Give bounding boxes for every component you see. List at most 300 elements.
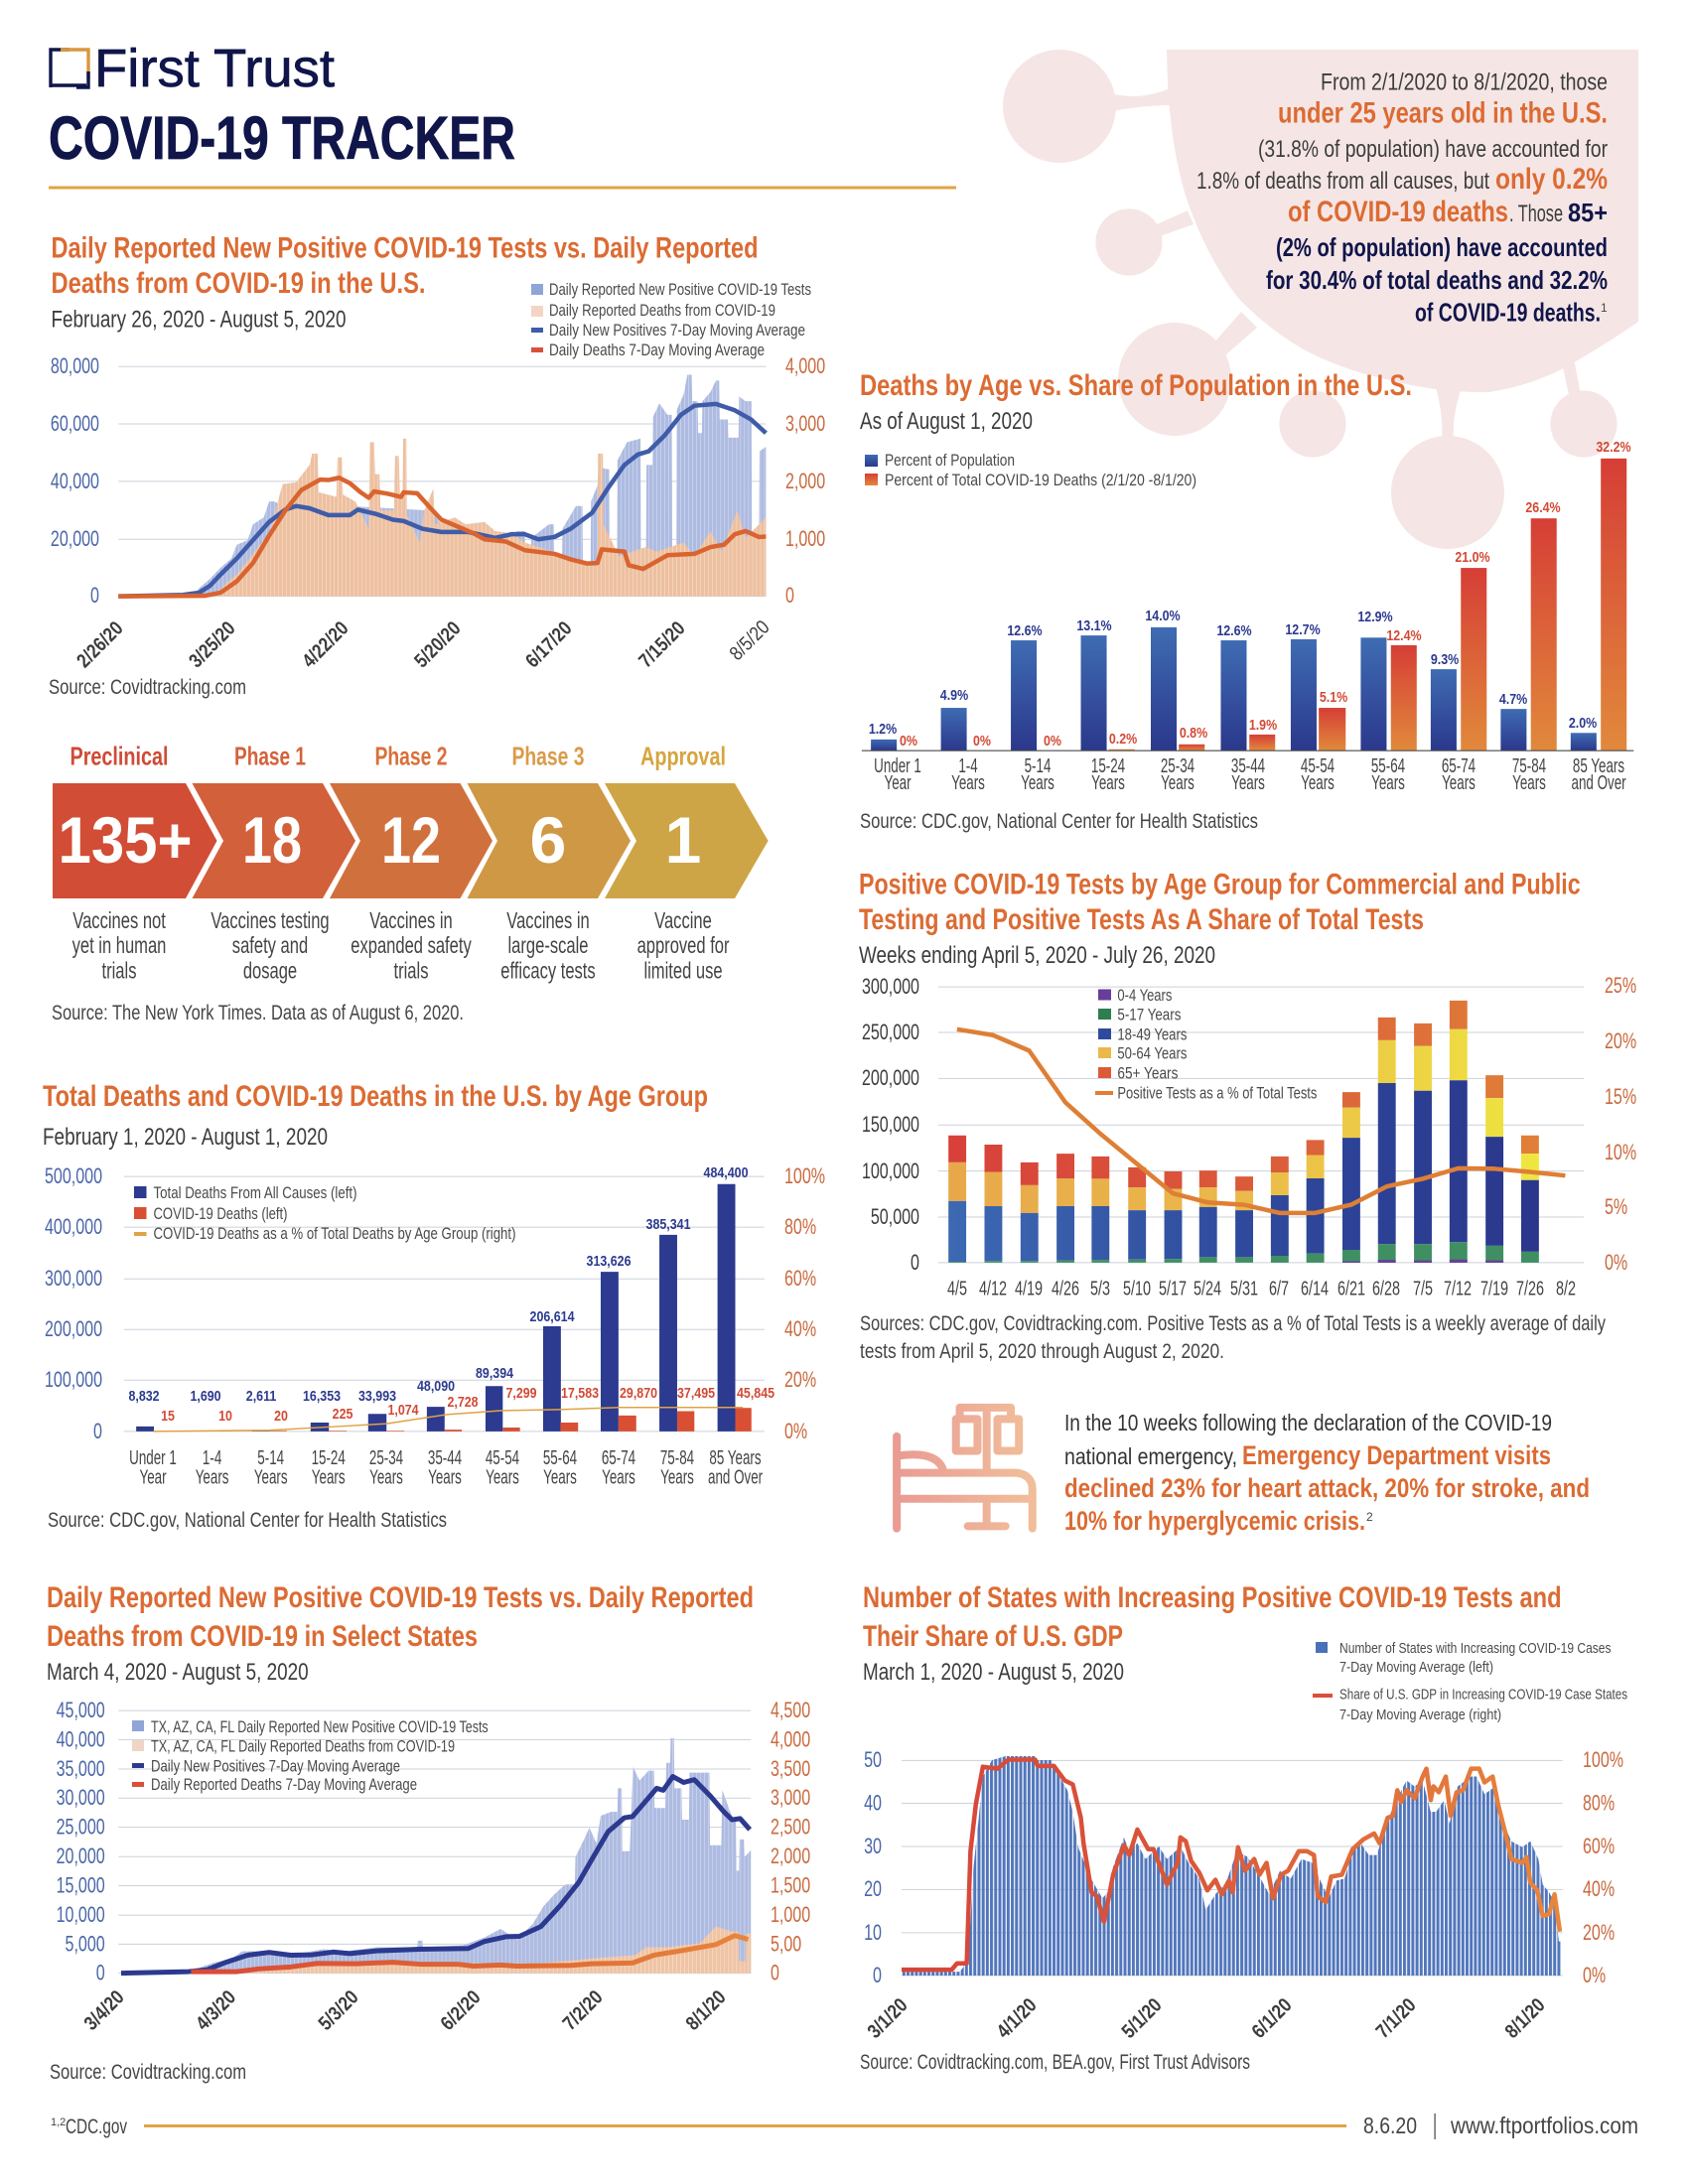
chart: select states: 3,500 — [771, 1758, 810, 1782]
bar chart: deaths by age group: 35-44 — [428, 1446, 462, 1469]
chart: daily tests and deaths: 2,000 — [785, 471, 825, 494]
legend: chart 4: 50-64 Years — [1117, 1044, 1187, 1063]
chevrons with counts: 1 — [665, 803, 701, 877]
heading: chart 1: Daily Reported New Positive COVID-19 Tests vs. Daily Reported — [52, 232, 759, 264]
bar chart: population and deaths by age: 35-44 — [1231, 754, 1265, 777]
bar chart: population and deaths by age: and Over — [1572, 771, 1626, 794]
chevrons with counts: 6 — [530, 803, 566, 877]
chart: daily tests and deaths: 3/25/20 — [185, 617, 240, 672]
bar chart: deaths by age group: 500,000 — [45, 1165, 102, 1189]
stacked bar chart: tests by age: 4/19 — [1015, 1277, 1043, 1299]
stage descriptions: Vaccines in — [506, 908, 590, 934]
stacked bar chart: tests by age: 150,000 — [862, 1114, 919, 1138]
stacked bar chart: tests by age: 6/28 — [1372, 1277, 1400, 1299]
legend: chart 5 — [132, 1717, 489, 1794]
chart: states count and GDP share: 40% — [1583, 1878, 1615, 1902]
stage labels: Phase 1 — [234, 741, 306, 770]
bar chart: population and deaths by age: 21.0% — [1455, 549, 1490, 565]
heading: chart 1 — [52, 232, 759, 334]
chart: select states: 5/3/20 — [315, 1986, 363, 2035]
bar chart: deaths by age group: 15-24 — [312, 1446, 346, 1469]
bar chart: population and deaths by age: 12.6% — [1007, 622, 1043, 638]
stage descriptions: expanded safety — [351, 933, 472, 959]
chart: daily tests and deaths: 3,000 — [785, 413, 825, 437]
source: chart 4: tests from April 5, 2020 through August 2, 2020. — [860, 1340, 1224, 1363]
panel: total deaths and COVID-19 deaths by age — [43, 1080, 825, 1532]
bar chart: deaths by age group: Years — [602, 1466, 635, 1488]
stage descriptions: Vaccines testing — [211, 908, 330, 934]
chart: states count and GDP share: 0% — [1583, 1965, 1606, 1988]
legend: chart 4: 18-49 Years — [1117, 1024, 1187, 1043]
text: emergency visits: Emergency Department visits — [1242, 1440, 1551, 1470]
bar chart: population and deaths by age: 26.4% — [1525, 499, 1561, 515]
title: COVID-19 TRACKER — [49, 104, 515, 172]
chart: states count and GDP share: 80% — [1583, 1792, 1615, 1816]
chart: daily tests and deaths: 1,000 — [785, 528, 825, 552]
legend: chart 3 — [134, 1183, 516, 1243]
bar chart: population and deaths by age: Years — [1371, 771, 1405, 794]
bar chart: population and deaths by age: Under 1 — [874, 754, 921, 777]
text: emergency visits: declined 23% for heart attack, 20% for stroke, and — [1064, 1473, 1590, 1503]
panel: emergency department callout — [897, 1408, 1590, 1536]
chevrons with counts — [53, 783, 769, 898]
stacked bar chart: tests by age: 50,000 — [871, 1206, 919, 1230]
chart: select states: 4,000 — [771, 1728, 810, 1752]
bar chart: population and deaths by age: Years — [1091, 771, 1125, 794]
stacked bar chart: tests by age: 7/12 — [1444, 1277, 1472, 1299]
bar chart: population and deaths by age: Years — [1021, 771, 1055, 794]
callout: age share of deaths: 85+ — [1568, 198, 1608, 227]
source: chart 3: Source: CDC.gov, National Center for Health Statistics — [48, 1509, 447, 1532]
legend: chart 4: 65+ Years — [1117, 1063, 1178, 1082]
chart: states count and GDP share: 20 — [864, 1878, 882, 1902]
bar chart: deaths by age group: 65-74 — [602, 1446, 635, 1469]
chart: states count and GDP share: 100% — [1583, 1749, 1623, 1773]
callout: age share of deaths: From 2/1/2020 to 8/1/2020, those — [1321, 69, 1608, 95]
panel: vaccine pipeline — [52, 741, 769, 1024]
bar chart: deaths by age group: 80% — [784, 1216, 816, 1240]
legend: chart 3: COVID-19 Deaths (left) — [153, 1204, 288, 1223]
stacked bar chart: tests by age: 4/12 — [979, 1277, 1007, 1299]
heading: chart 3 — [43, 1080, 708, 1151]
bar chart: deaths by age group: 200,000 — [45, 1318, 102, 1342]
bar chart: population and deaths by age: 12.4% — [1386, 627, 1422, 643]
stage descriptions: Vaccines in — [369, 908, 453, 934]
panel: positive tests by age group — [859, 868, 1636, 1363]
legend: chart 6: Number of States with Increasing COVID-19 Cases — [1339, 1640, 1611, 1657]
chart: states count and GDP share: 0 — [873, 1965, 882, 1988]
chart: select states — [57, 1700, 810, 2035]
legend: chart 5: TX, AZ, CA, FL Daily Reported New Positive COVID-19 Tests — [151, 1717, 489, 1736]
bar chart: population and deaths by age: 14.0% — [1145, 608, 1181, 623]
stacked bar chart: tests by age: 6/21 — [1337, 1277, 1365, 1299]
bar chart: population and deaths by age: 5-14 — [1025, 754, 1051, 777]
bar chart: deaths by age group: 45,845 — [737, 1385, 774, 1401]
chart: daily tests and deaths: 4,000 — [785, 355, 825, 379]
chart: select states: 45,000 — [57, 1700, 105, 1723]
chart: daily tests and deaths — [51, 355, 825, 672]
bar chart: deaths by age group: 100% — [784, 1165, 825, 1189]
bar chart: deaths by age group: Years — [369, 1466, 403, 1488]
bar chart: deaths by age group: 1,074 — [387, 1402, 419, 1418]
chart: select states: 2,500 — [771, 1816, 810, 1840]
chart: daily tests and deaths: 6/17/20 — [521, 617, 577, 672]
callout: age share of deaths: for 30.4% of total deaths and 32.2% — [1266, 265, 1608, 295]
panel: deaths by age vs population — [860, 369, 1633, 833]
bar chart: deaths by age group: 20 — [274, 1408, 288, 1424]
bar chart: deaths by age group: Years — [428, 1466, 462, 1488]
bar chart: population and deaths by age: 0% — [1044, 733, 1061, 749]
footnote: 1,2 — [51, 2116, 66, 2128]
bar chart: population and deaths by age: 4.7% — [1499, 691, 1527, 707]
bar chart: deaths by age group: 7,299 — [505, 1385, 537, 1401]
chart: daily tests and deaths: 0 — [90, 585, 99, 609]
bar chart: population and deaths by age: 1.9% — [1249, 717, 1277, 733]
bar chart: population and deaths by age: 4.9% — [940, 687, 968, 703]
legend: chart 1: Daily Reported New Positive COVID-19 Tests — [549, 280, 811, 299]
chart: daily tests and deaths: 2/26/20 — [72, 617, 128, 672]
footnote — [51, 2116, 127, 2138]
stacked bar chart: tests by age: 8/2 — [1556, 1277, 1576, 1299]
stacked bar chart: tests by age: 5/31 — [1230, 1277, 1258, 1299]
legend: chart 5: Daily Reported Deaths 7-Day Moving Average — [151, 1775, 417, 1794]
heading: chart 4: Testing and Positive Tests As A Share of Total Tests — [859, 903, 1424, 936]
bar chart: deaths by age group: 8,832 — [128, 1388, 160, 1404]
stage descriptions: trials — [394, 959, 428, 984]
chart: select states: 4/3/20 — [192, 1986, 240, 2035]
stage descriptions: dosage — [243, 959, 297, 984]
bar chart: deaths by age group — [45, 1164, 825, 1488]
stage descriptions — [72, 908, 730, 984]
callout: age share of deaths: 1.8% of deaths from all causes, but — [1196, 168, 1489, 195]
chart: daily tests and deaths: 20,000 — [51, 528, 99, 552]
legend: chart 5: Daily New Positives 7-Day Moving Average — [151, 1757, 400, 1775]
chart: select states: 3,000 — [771, 1787, 810, 1811]
bar chart: population and deaths by age: 75-84 — [1512, 754, 1546, 777]
stacked bar chart: tests by age: 5/3 — [1090, 1277, 1110, 1299]
bar chart: deaths by age group: 206,614 — [530, 1308, 575, 1324]
stacked bar chart: tests by age: 15% — [1605, 1086, 1636, 1110]
bar chart: deaths by age group: and Over — [708, 1466, 763, 1488]
bar chart: deaths by age group: 25-34 — [369, 1446, 403, 1469]
legend: chart 1: Daily New Positives 7-Day Moving Average — [549, 321, 805, 340]
bar chart: population and deaths by age: 12.6% — [1216, 622, 1252, 638]
bar chart: deaths by age group: 10 — [218, 1408, 232, 1424]
bar chart: deaths by age group: 40% — [784, 1318, 816, 1342]
stage descriptions: Vaccine — [654, 908, 712, 934]
bar chart: deaths by age group: Years — [254, 1466, 288, 1488]
footnote: CDC.gov — [66, 2116, 127, 2138]
chart: states count and GDP share: 40 — [864, 1792, 882, 1816]
chart: select states: 35,000 — [57, 1758, 105, 1782]
legend: chart 6: 7-Day Moving Average (right) — [1339, 1706, 1501, 1723]
bar chart: population and deaths by age: 55-64 — [1371, 754, 1405, 777]
chart: daily tests and deaths: 0 — [785, 585, 794, 609]
source: chart 6: Source: Covidtracking.com, BEA.gov, First Trust Advisors — [860, 2051, 1250, 2074]
heading: chart 6 — [863, 1581, 1562, 1686]
heading: chart 6: Their Share of U.S. GDP — [863, 1620, 1123, 1653]
stacked bar chart: tests by age — [862, 975, 1636, 1299]
legend: chart 1 — [531, 280, 811, 359]
bar chart: deaths by age group: 55-64 — [543, 1446, 577, 1469]
text: emergency visits — [1064, 1410, 1590, 1536]
chart: select states: 15,000 — [57, 1874, 105, 1898]
heading: chart 4 — [859, 868, 1581, 969]
chart: select states: 5,00 — [771, 1933, 801, 1957]
bar chart: deaths by age group: Years — [486, 1466, 519, 1488]
chart: states count and GDP share: 8/1/20 — [1501, 1994, 1550, 2043]
bar chart: deaths by age group: Years — [312, 1466, 346, 1488]
heading: chart 1: Deaths from COVID-19 in the U.S. — [52, 267, 425, 300]
bar chart: population and deaths by age: Year — [885, 771, 912, 794]
bar chart: population and deaths by age: 1-4 — [958, 754, 978, 777]
heading: chart 2: As of August 1, 2020 — [860, 408, 1033, 435]
stacked bar chart: tests by age: 5/10 — [1123, 1277, 1151, 1299]
chart: states count and GDP share: 7/1/20 — [1372, 1994, 1421, 2043]
chevrons with counts: 135+ — [58, 803, 193, 877]
bar chart: deaths by age group: 2,728 — [447, 1394, 479, 1410]
callout: age share of deaths: (31.8% of population) have accounted for — [1258, 136, 1608, 163]
bar chart: deaths by age group: 1,690 — [190, 1388, 221, 1404]
stacked bar chart: tests by age: 200,000 — [862, 1067, 919, 1091]
chart: select states: 4,500 — [771, 1700, 810, 1723]
text: emergency visits: In the 10 weeks following the declaration of the COVID-19 — [1064, 1410, 1552, 1435]
chart: select states: 8/1/20 — [682, 1986, 731, 2035]
heading: chart 5 — [47, 1581, 754, 1686]
icon: hospital bed with IV — [897, 1408, 1033, 1529]
stacked bar chart: tests by age: 7/5 — [1413, 1277, 1433, 1299]
chart: states count and GDP share: 30 — [864, 1836, 882, 1859]
bar chart: deaths by age group: 15 — [161, 1408, 175, 1424]
background virus shape — [1003, 50, 1638, 549]
heading: chart 2 — [860, 369, 1412, 435]
chart: states count and GDP share: 3/1/20 — [864, 1994, 913, 2043]
chart: daily tests and deaths: 5/20/20 — [410, 617, 466, 672]
chart: daily tests and deaths: 4/22/20 — [298, 617, 353, 672]
date and website — [1363, 2113, 1638, 2139]
stacked bar chart: tests by age: 4/5 — [947, 1277, 967, 1299]
chart: states count and GDP share: 10 — [864, 1922, 882, 1946]
stacked bar chart: tests by age: 300,000 — [862, 976, 919, 1000]
legend: chart 5: TX, AZ, CA, FL Daily Reported Deaths from COVID-19 — [151, 1737, 455, 1756]
chevrons with counts: 18 — [242, 803, 302, 877]
bar chart: population and deaths by age: 15-24 — [1091, 754, 1125, 777]
chart: daily tests and deaths: 8/5/20 — [726, 616, 774, 665]
source: chart 5: Source: Covidtracking.com — [50, 2061, 246, 2084]
stage descriptions: efficacy tests — [500, 959, 596, 984]
legend: chart 4: Positive Tests as a % of Total Tests — [1117, 1084, 1317, 1103]
legend: chart 4 — [1095, 986, 1317, 1103]
panel: states with increasing tests and GDP — [860, 1581, 1627, 2074]
panel: daily tests vs deaths U.S. — [49, 232, 825, 699]
text: emergency visits: national emergency, — [1064, 1443, 1237, 1469]
chart: select states: 7/2/20 — [559, 1986, 608, 2035]
bar chart: population and deaths by age: 9.3% — [1431, 651, 1459, 667]
chart: select states: 6/2/20 — [437, 1986, 486, 2035]
heading: chart 2: Deaths by Age vs. Share of Population in the U.S. — [860, 369, 1412, 402]
chart: select states: 10,000 — [57, 1904, 105, 1928]
bar chart: deaths by age group: 75-84 — [660, 1446, 694, 1469]
heading: chart 5: Deaths from COVID-19 in Select States — [47, 1620, 478, 1653]
bar chart: deaths by age group: 48,090 — [417, 1378, 455, 1394]
bar chart: deaths by age group: Year — [140, 1466, 167, 1488]
chart: select states: 40,000 — [57, 1728, 105, 1752]
stacked bar chart: tests by age: 5/24 — [1194, 1277, 1221, 1299]
legend: chart 3: COVID-19 Deaths as a % of Total Deaths by Age Group (right) — [153, 1224, 516, 1243]
bar chart: deaths by age group: 225 — [333, 1406, 353, 1422]
chart: states count and GDP share: 5/1/20 — [1118, 1994, 1167, 2043]
logo: First Trust: First Trust — [94, 39, 335, 98]
source: chart 1: Source: Covidtracking.com — [49, 676, 246, 699]
bar chart: population and deaths by age: 0% — [900, 733, 917, 749]
bar chart: population and deaths by age: Years — [951, 771, 985, 794]
bar chart: deaths by age group: Years — [196, 1466, 228, 1488]
legend: chart 2: Percent of Total COVID-19 Deaths (2/1/20 -8/1/20) — [885, 471, 1196, 489]
chart: select states: 2,000 — [771, 1845, 810, 1869]
bar chart: deaths by age group: 300,000 — [45, 1268, 102, 1292]
source: chart 4 — [860, 1312, 1606, 1363]
bar chart: deaths by age group: 0 — [93, 1421, 102, 1444]
bar chart: deaths by age group: 85 Years — [709, 1446, 762, 1469]
bar chart: population and deaths by age: 85 Years — [1573, 754, 1624, 777]
chart: select states: 0 — [771, 1962, 779, 1985]
bar chart: deaths by age group: 37,495 — [677, 1385, 715, 1401]
bar chart: deaths by age group: 0% — [784, 1421, 807, 1444]
heading: chart 1: February 26, 2020 - August 5, 2020 — [52, 307, 346, 334]
panel: select states tests vs deaths — [47, 1581, 810, 2084]
heading: chart 3: February 1, 2020 - August 1, 2020 — [43, 1124, 328, 1151]
chart: states count and GDP share: 4/1/20 — [993, 1994, 1042, 2043]
bar chart: deaths by age group: 29,870 — [620, 1385, 657, 1401]
bar chart: deaths by age group: 33,993 — [358, 1388, 396, 1404]
chart: select states: 20,000 — [57, 1845, 105, 1869]
bar chart: deaths by age group: 17,583 — [561, 1385, 599, 1401]
bar chart: deaths by age group: 313,626 — [587, 1253, 632, 1269]
bar chart: deaths by age group: 60% — [784, 1268, 816, 1292]
text: emergency visits: 2 — [1366, 1510, 1373, 1524]
bar chart: population and deaths by age: 0.8% — [1180, 725, 1207, 741]
bar chart: deaths by age group: Under 1 — [129, 1446, 177, 1469]
stage labels: Phase 2 — [375, 741, 447, 770]
legend: chart 6 — [1313, 1640, 1627, 1723]
bar chart: deaths by age group: 385,341 — [646, 1216, 691, 1232]
bar chart: population and deaths by age: 0% — [973, 733, 991, 749]
bar chart: population and deaths by age: 32.2% — [1596, 439, 1631, 455]
chart: select states: 5,000 — [66, 1933, 105, 1957]
chart: select states: 1,000 — [771, 1904, 810, 1928]
stage descriptions: large-scale — [508, 933, 588, 959]
date and website: www.ftportfolios.com — [1450, 2113, 1638, 2138]
stacked bar chart: tests by age: 4/26 — [1052, 1277, 1079, 1299]
chart: daily tests and deaths: 60,000 — [51, 413, 99, 437]
stacked bar chart: tests by age: 250,000 — [862, 1022, 919, 1045]
bar chart: population and deaths by age — [862, 439, 1633, 794]
bar chart: deaths by age group: 100,000 — [45, 1369, 102, 1393]
bar chart: population and deaths by age: 0.2% — [1109, 731, 1137, 747]
chart: states count and GDP share: 60% — [1583, 1836, 1615, 1859]
legend: chart 2 — [865, 451, 1196, 489]
chart: select states: 30,000 — [57, 1787, 105, 1811]
stacked bar chart: tests by age: 0 — [911, 1252, 919, 1276]
callout: age share of deaths: 1 — [1601, 301, 1608, 315]
legend: chart 4: 0-4 Years — [1117, 986, 1172, 1005]
chart: select states: 3/4/20 — [80, 1986, 129, 2035]
chart: select states: 25,000 — [57, 1816, 105, 1840]
chart: daily tests and deaths: 80,000 — [51, 355, 99, 379]
stacked bar chart: tests by age: 25% — [1605, 975, 1636, 999]
bar chart: population and deaths by age: 65-74 — [1442, 754, 1476, 777]
legend: chart 1: Daily Reported Deaths from COVID-19 — [549, 301, 775, 320]
callout: age share of deaths: of COVID-19 deaths — [1288, 196, 1508, 228]
legend: chart 6: 7-Day Moving Average (left) — [1339, 1659, 1493, 1676]
legend: chart 2: Percent of Population — [885, 451, 1015, 470]
bar chart: deaths by age group: 484,400 — [704, 1164, 749, 1180]
stacked bar chart: tests by age: 7/26 — [1516, 1277, 1544, 1299]
text: emergency visits: 10% for hyperglycemic crisis. — [1064, 1506, 1365, 1536]
source: chart 2: Source: CDC.gov, National Center for Health Statistics — [860, 810, 1258, 833]
heading: chart 5: Daily Reported New Positive COVID-19 Tests vs. Daily Reported — [47, 1581, 754, 1614]
bar chart: deaths by age group: 16,353 — [303, 1388, 341, 1404]
source: pipeline: Source: The New York Times. Data as of August 6, 2020. — [52, 1002, 464, 1024]
stage labels: Preclinical — [70, 741, 169, 770]
heading: chart 6: March 1, 2020 - August 5, 2020 — [863, 1659, 1124, 1686]
stage labels — [70, 741, 726, 770]
header — [49, 39, 956, 189]
chart: daily tests and deaths: 40,000 — [51, 471, 99, 494]
bar chart: deaths by age group: 2,611 — [246, 1388, 277, 1404]
stacked bar chart: tests by age: 5/17 — [1159, 1277, 1187, 1299]
legend: chart 4: 5-17 Years — [1117, 1006, 1181, 1024]
stage descriptions: limited use — [643, 959, 723, 984]
bar chart: deaths by age group: Years — [660, 1466, 694, 1488]
bar chart: deaths by age group: 89,394 — [476, 1365, 513, 1381]
chart: states count and GDP share — [864, 1749, 1623, 2043]
bar chart: population and deaths by age: 25-34 — [1161, 754, 1195, 777]
callout: age share of deaths: of COVID-19 deaths. — [1415, 298, 1601, 328]
chart: states count and GDP share: 20% — [1583, 1922, 1615, 1946]
bar chart: deaths by age group: 1-4 — [203, 1446, 221, 1469]
heading: chart 5: March 4, 2020 - August 5, 2020 — [47, 1659, 309, 1686]
bar chart: population and deaths by age: 2.0% — [1569, 715, 1597, 731]
callout: age share of deaths — [1196, 69, 1608, 328]
stacked bar chart: tests by age: 7/19 — [1480, 1277, 1508, 1299]
stage labels: Phase 3 — [512, 741, 584, 770]
bar chart: population and deaths by age: 12.9% — [1357, 609, 1393, 624]
footer — [51, 2113, 1638, 2139]
bar chart: deaths by age group: 20% — [784, 1369, 816, 1393]
callout: age share of deaths: only 0.2% — [1495, 163, 1608, 196]
chart: states count and GDP share: 6/1/20 — [1248, 1994, 1297, 2043]
stacked bar chart: tests by age: 5% — [1605, 1196, 1627, 1220]
bar chart: population and deaths by age: Years — [1231, 771, 1265, 794]
bar chart: population and deaths by age: 1.2% — [869, 721, 897, 737]
bar chart: population and deaths by age: 12.7% — [1285, 621, 1321, 637]
callout: age share of deaths: . Those — [1509, 201, 1563, 227]
bar chart: population and deaths by age: Years — [1512, 771, 1546, 794]
bar chart: population and deaths by age: 45-54 — [1301, 754, 1335, 777]
stage descriptions: safety and — [232, 933, 308, 959]
legend: chart 3: Total Deaths From All Causes (left) — [153, 1183, 357, 1202]
chart: daily tests and deaths: 7/15/20 — [634, 617, 690, 672]
bar chart: deaths by age group: 5-14 — [257, 1446, 284, 1469]
date and website: 8.6.20 — [1363, 2113, 1417, 2138]
bar chart: deaths by age group: 400,000 — [45, 1216, 102, 1240]
stage descriptions: approved for — [637, 933, 730, 959]
chart: select states: 0 — [96, 1962, 105, 1985]
stage descriptions: Vaccines not — [72, 908, 166, 934]
bar chart: population and deaths by age: 13.1% — [1076, 617, 1112, 633]
bar chart: population and deaths by age: 5.1% — [1320, 689, 1347, 705]
